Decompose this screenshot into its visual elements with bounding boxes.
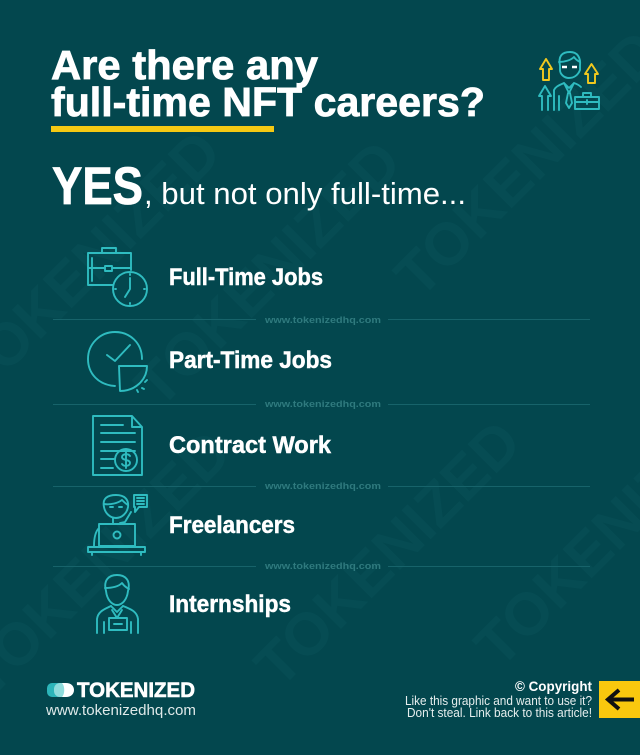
item: internships — [97, 575, 291, 633]
watermark url 2: www.tokenizedhq.com — [264, 399, 381, 410]
title: Are there any — [51, 42, 318, 88]
title — [51, 42, 485, 125]
copyright note — [405, 679, 592, 720]
copyright note: Like this graphic and want to use it? — [405, 694, 592, 708]
item: freelancers: Freelancers — [169, 512, 295, 539]
logo: www.tokenizedhq.com — [45, 702, 196, 719]
icon: freelancer at laptop — [88, 495, 147, 555]
item: part-time jobs — [88, 332, 332, 392]
watermark url 4: www.tokenizedhq.com — [264, 561, 381, 572]
logo — [45, 679, 196, 719]
logo mark — [47, 683, 74, 697]
logo: TOKENIZED — [77, 679, 195, 702]
item: contract work — [93, 416, 332, 475]
item: internships: Internships — [169, 591, 291, 618]
back arrow button — [599, 681, 640, 718]
icon: businessman with arrows — [539, 52, 599, 110]
item: full-time jobs: Full-Time Jobs — [169, 264, 323, 291]
subheading — [52, 157, 466, 216]
icon: briefcase and clock — [88, 248, 147, 306]
item: full-time jobs — [88, 248, 323, 306]
subheading: , but not only full-time... — [144, 176, 466, 211]
icon: contract document — [93, 416, 142, 475]
copyright note: © Copyright — [515, 679, 592, 694]
item: part-time jobs: Part-Time Jobs — [169, 347, 332, 374]
text: TOKENIZED — [122, 127, 414, 419]
copyright note: Don't steal. Link back to this article! — [407, 706, 592, 720]
icon: intern with badge — [97, 575, 138, 633]
subheading: YES — [52, 157, 143, 216]
title underline — [51, 126, 274, 132]
text: TOKENIZED — [242, 407, 534, 699]
item: freelancers — [88, 495, 295, 555]
watermark url 1: www.tokenizedhq.com — [264, 315, 381, 326]
icon: pie clock with check — [88, 332, 147, 392]
title: full-time NFT careers? — [51, 79, 485, 125]
item: contract work: Contract Work — [169, 432, 332, 459]
watermark url 3: www.tokenizedhq.com — [264, 481, 381, 492]
